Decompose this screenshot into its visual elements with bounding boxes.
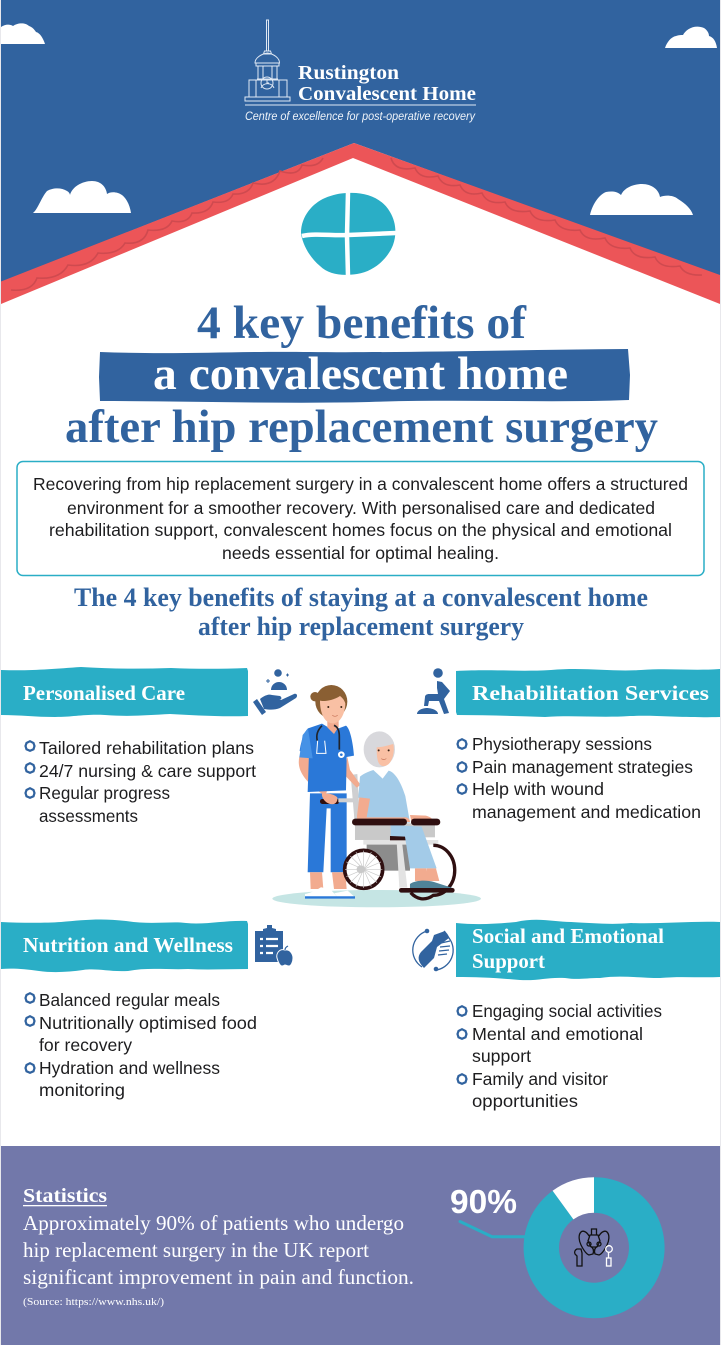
wheelchair frame [351, 774, 455, 899]
list: rehabilitation services: Physiotherapy sessions [472, 734, 652, 754]
panel: social and emotional support [413, 920, 720, 1111]
list: nutrition and wellness: Hydration and wellness [39, 1058, 220, 1078]
list: social and emotional support [458, 1001, 662, 1111]
header sky background [1, 0, 720, 282]
subheading [74, 583, 648, 641]
callout: 90% [450, 1183, 526, 1237]
wheels and armrests [345, 819, 455, 893]
subheading: after hip replacement surgery [198, 612, 524, 641]
list: personalised care: assessments [39, 806, 138, 826]
banner: social and emotional support: Social and Emotional [472, 924, 664, 948]
cloud: mid right [590, 184, 693, 215]
banner: social and emotional support: Support [472, 949, 545, 973]
icon: helping hands [413, 929, 453, 971]
statistics text [23, 1211, 414, 1289]
icon: clock tower [245, 20, 290, 101]
intro text box: rehabilitation support, convalescent homes focus on the physical and emotional [49, 520, 672, 540]
statistics text: Approximately 90% of patients who undergo [23, 1211, 404, 1235]
list: social and emotional support: Engaging social activities [472, 1001, 662, 1021]
panel: statistics [1, 1146, 720, 1345]
title: a convalescent home [153, 348, 568, 400]
list: rehabilitation services: Help with wound [472, 779, 604, 799]
list: personalised care: Tailored rehabilitation plans [39, 738, 254, 758]
logo name: Rustington [298, 62, 399, 84]
panel: rehabilitation services [417, 668, 720, 822]
cloud: top right [665, 27, 717, 48]
cloud: mid left [33, 181, 131, 213]
intro text box: Recovering from hip replacement surgery in a convalescent home offers a structured [33, 474, 688, 494]
banner: nutrition and wellness: Nutrition and Wellness [23, 933, 233, 957]
intro text box [17, 462, 704, 576]
illustration: nurse and patient in wheelchair [272, 685, 481, 907]
logo tagline: Centre of excellence for post-operative recovery [245, 111, 476, 123]
title [65, 297, 658, 453]
list: personalised care: Regular progress [39, 783, 170, 803]
list: social and emotional support: Mental and emotional [472, 1024, 643, 1044]
icon: clipboard and apple [255, 925, 293, 966]
title highlight banner [99, 349, 630, 403]
logo: Rustington Convalescent Home: Convalescent Home [298, 83, 476, 105]
floor shadow [272, 890, 481, 907]
list: social and emotional support: Family and visitor [472, 1069, 608, 1089]
panel: personalised care [1, 667, 297, 826]
title: 4 key benefits of [197, 297, 527, 349]
intro text box: environment for a smoother recovery. With personalised care and dedicated [67, 498, 655, 518]
list: nutrition and wellness [26, 990, 257, 1100]
banner: rehabilitation services: Rehabilitation Services [472, 681, 709, 705]
source note: (Source: https://www.nhs.uk/) [23, 1297, 165, 1308]
list: nutrition and wellness: monitoring [39, 1080, 125, 1100]
icon: round window [301, 192, 396, 276]
list: rehabilitation services: Pain management strategies [472, 757, 693, 777]
cloud: top left [1, 23, 45, 44]
list: nutrition and wellness: for recovery [39, 1035, 132, 1055]
icon: rehab exercise [417, 668, 450, 714]
banner: personalised care [1, 667, 248, 717]
banner: nutrition and wellness [1, 919, 248, 972]
banner: social and emotional support [456, 920, 720, 980]
callout: 90%: 90% [450, 1183, 517, 1220]
logo: Rustington Convalescent Home [245, 20, 476, 123]
list: rehabilitation services [458, 734, 701, 822]
list: rehabilitation services: management and medication [472, 802, 701, 822]
list: social and emotional support: opportunities [472, 1091, 578, 1111]
panel: nutrition and wellness [1, 919, 293, 1100]
patient [357, 731, 453, 889]
intro text box: needs essential for optimal healing. [222, 543, 499, 563]
statistics text: hip replacement surgery in the UK report [23, 1238, 369, 1262]
roof [1, 143, 720, 304]
list: social and emotional support: support [472, 1046, 531, 1066]
statistics text: significant improvement in pain and function. [23, 1265, 414, 1289]
statistics heading: Statistics [23, 1185, 107, 1207]
banner: rehabilitation services [456, 669, 720, 717]
subheading: The 4 key benefits of staying at a convalescent home [74, 583, 648, 612]
list: personalised care: 24/7 nursing & care support [39, 761, 256, 781]
title: after hip replacement surgery [65, 401, 658, 453]
icon: caring hand [253, 669, 297, 715]
icon: hip joint [575, 1229, 612, 1266]
nurse [299, 685, 361, 899]
donut chart: 90% [524, 1177, 665, 1318]
list: personalised care [26, 738, 256, 826]
list: nutrition and wellness: Balanced regular meals [39, 990, 220, 1010]
banner: personalised care: Personalised Care [23, 681, 185, 705]
list: nutrition and wellness: Nutritionally optimised food [39, 1013, 257, 1033]
